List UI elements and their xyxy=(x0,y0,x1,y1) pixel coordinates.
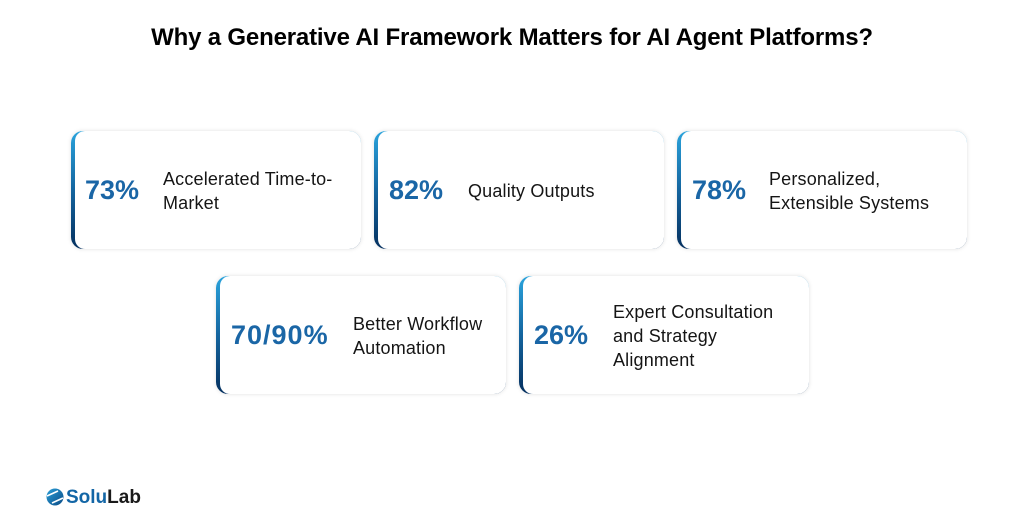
label: personalized, extensible systems xyxy=(769,169,929,213)
wordmark: SoluLab xyxy=(66,487,141,508)
panel: better workflow automation xyxy=(216,276,506,394)
label: personalized, extensible systems: Extensible Systems xyxy=(769,193,929,213)
label: expert consultation and strategy alignment: and Strategy xyxy=(613,326,717,346)
label: personalized, extensible systems: Personalized, xyxy=(769,169,880,189)
logo: SoluLab xyxy=(46,487,141,508)
panel: accelerated time-to-market xyxy=(71,131,361,249)
title: Why a Generative AI Framework Matters for AI Agent Platforms? xyxy=(151,24,873,51)
stat: 73%: 73% xyxy=(85,175,139,205)
label: better workflow automation: Automation xyxy=(353,338,446,358)
icon: logo mark xyxy=(46,488,64,506)
stat: 82%: 82% xyxy=(389,175,443,205)
label: better workflow automation xyxy=(353,314,482,358)
panel: quality outputs xyxy=(374,131,664,249)
label: better workflow automation: Better Workflow xyxy=(353,314,482,334)
panel: personalized, extensible systems xyxy=(677,131,967,249)
panel: expert consultation and strategy alignment xyxy=(519,276,809,394)
stat: 78%: 78% xyxy=(692,175,746,205)
label: accelerated time-to-market xyxy=(163,169,332,213)
label: expert consultation and strategy alignment: Expert Consultation xyxy=(613,302,773,322)
label: accelerated time-to-market: Market xyxy=(163,193,219,213)
label: expert consultation and strategy alignment: Alignment xyxy=(613,350,695,370)
label: expert consultation and strategy alignment xyxy=(613,302,773,370)
stat: 26%: 26% xyxy=(534,320,588,350)
stat: 70/90%: 70/90% xyxy=(231,320,329,350)
label: quality outputs: Quality Outputs xyxy=(468,181,595,201)
label: accelerated time-to-market: Accelerated Time-to- xyxy=(163,169,332,189)
